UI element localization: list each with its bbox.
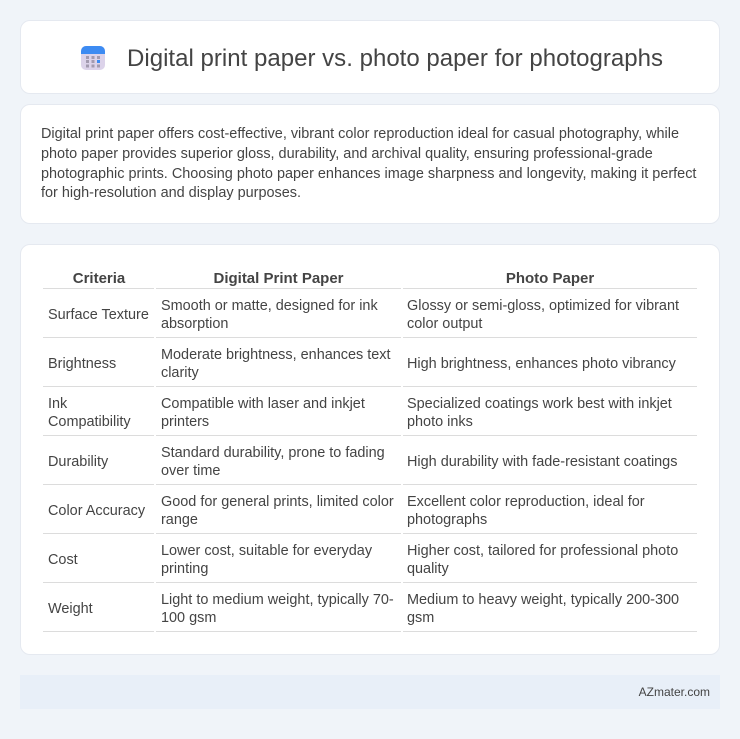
row: Ink Compatibility: Compatibility — [48, 414, 131, 430]
icon: calendar — [81, 46, 105, 70]
row: Surface Texture: Smooth or matte, designed for ink — [161, 298, 378, 314]
row: Surface Texture — [43, 298, 697, 338]
row: Brightness: Brightness — [48, 356, 116, 372]
title: Digital print paper vs. photo paper for photographs — [127, 45, 663, 72]
row: Weight — [43, 592, 697, 632]
row: Color Accuracy: photographs — [407, 512, 487, 528]
table header: Photo Paper — [506, 270, 594, 287]
row: Cost: Higher cost, tailored for professional photo — [407, 543, 678, 559]
row: Color Accuracy: Good for general prints, limited color — [161, 494, 394, 510]
footer bar — [20, 675, 720, 709]
row: Weight: gsm — [407, 610, 434, 626]
row: Brightness: clarity — [161, 365, 199, 381]
row: Cost — [43, 543, 697, 583]
table header — [43, 270, 697, 289]
row: Ink Compatibility — [43, 396, 697, 436]
row: Color Accuracy: range — [161, 512, 198, 528]
row: Surface Texture: color output — [407, 316, 482, 332]
row: Ink Compatibility: Specialized coatings work best with inkjet — [407, 396, 672, 412]
table card — [20, 244, 720, 655]
summary text: Digital print paper offers cost-effective, vibrant color reproduction ideal for casual photography, while — [41, 126, 679, 142]
row: Ink Compatibility: printers — [161, 414, 209, 430]
row: Cost: Lower cost, suitable for everyday — [161, 543, 372, 559]
summary card — [20, 104, 720, 224]
table header: Digital Print Paper — [213, 270, 344, 287]
row: Cost: quality — [407, 561, 449, 577]
row: Color Accuracy — [43, 494, 697, 534]
footer credit: AZmater.com — [639, 685, 710, 699]
row: Brightness: High brightness, enhances photo vibrancy — [407, 356, 676, 372]
row: Surface Texture: Glossy or semi-gloss, optimized for vibrant — [407, 298, 679, 314]
summary text: photographic prints. Choosing photo paper enhances image sharpness and longevity, making it perfect — [41, 166, 696, 182]
row: Durability: Standard durability, prone to fading — [161, 445, 385, 461]
row: Weight: Weight — [48, 601, 93, 617]
row: Cost: printing — [161, 561, 208, 577]
summary text: photo paper provides superior gloss, durability, and archival quality, ensuring professional-grade — [41, 146, 653, 162]
row: Brightness — [43, 347, 697, 387]
row: Ink Compatibility: Compatible with laser and inkjet — [161, 396, 365, 412]
row: Durability — [43, 445, 697, 485]
row: Weight: 100 gsm — [161, 610, 216, 626]
row: Weight: Medium to heavy weight, typically 200-300 — [407, 592, 679, 608]
header card — [20, 20, 720, 94]
row: Ink Compatibility: Ink — [48, 396, 67, 412]
row: Durability: Durability — [48, 454, 108, 470]
summary text — [41, 126, 696, 201]
row: Weight: Light to medium weight, typically 70- — [161, 592, 394, 608]
row: Surface Texture: absorption — [161, 316, 228, 332]
row: Durability: High durability with fade-resistant coatings — [407, 454, 677, 470]
row: Color Accuracy: Color Accuracy — [48, 503, 145, 519]
table header: Criteria — [73, 270, 125, 287]
row: Cost: Cost — [48, 552, 78, 568]
row: Brightness: Moderate brightness, enhances text — [161, 347, 391, 363]
row: Color Accuracy: Excellent color reproduction, ideal for — [407, 494, 645, 510]
row: Surface Texture: Surface Texture — [48, 307, 149, 323]
summary text: for high-resolution and display purposes. — [41, 185, 301, 201]
row: Ink Compatibility: photo inks — [407, 414, 473, 430]
row: Durability: over time — [161, 463, 220, 479]
